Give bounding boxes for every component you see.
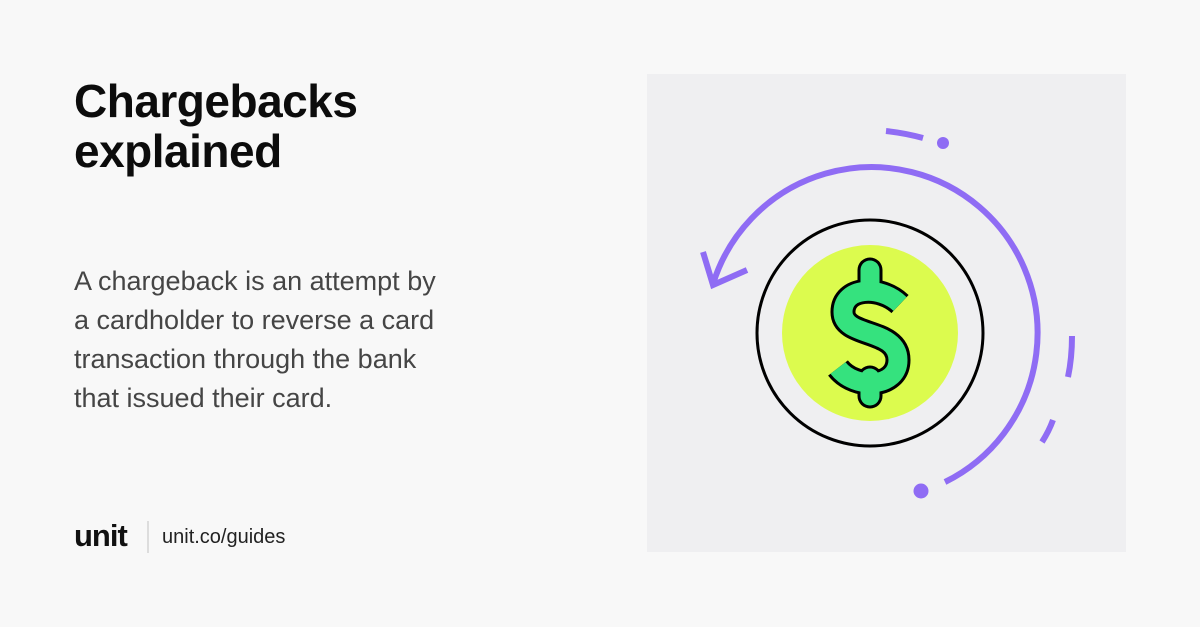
logo: unit bbox=[74, 518, 127, 553]
title: explained bbox=[74, 125, 282, 177]
title bbox=[74, 75, 357, 177]
icon: coin bbox=[757, 220, 983, 446]
footer bbox=[74, 518, 285, 553]
body text: A chargeback is an attempt by a cardholder to reverse a card transaction through the bank that issued their card. bbox=[74, 266, 436, 413]
title: Chargebacks bbox=[74, 75, 357, 127]
arrow: circular bbox=[703, 131, 1072, 482]
url: unit.co/guides bbox=[162, 526, 285, 548]
